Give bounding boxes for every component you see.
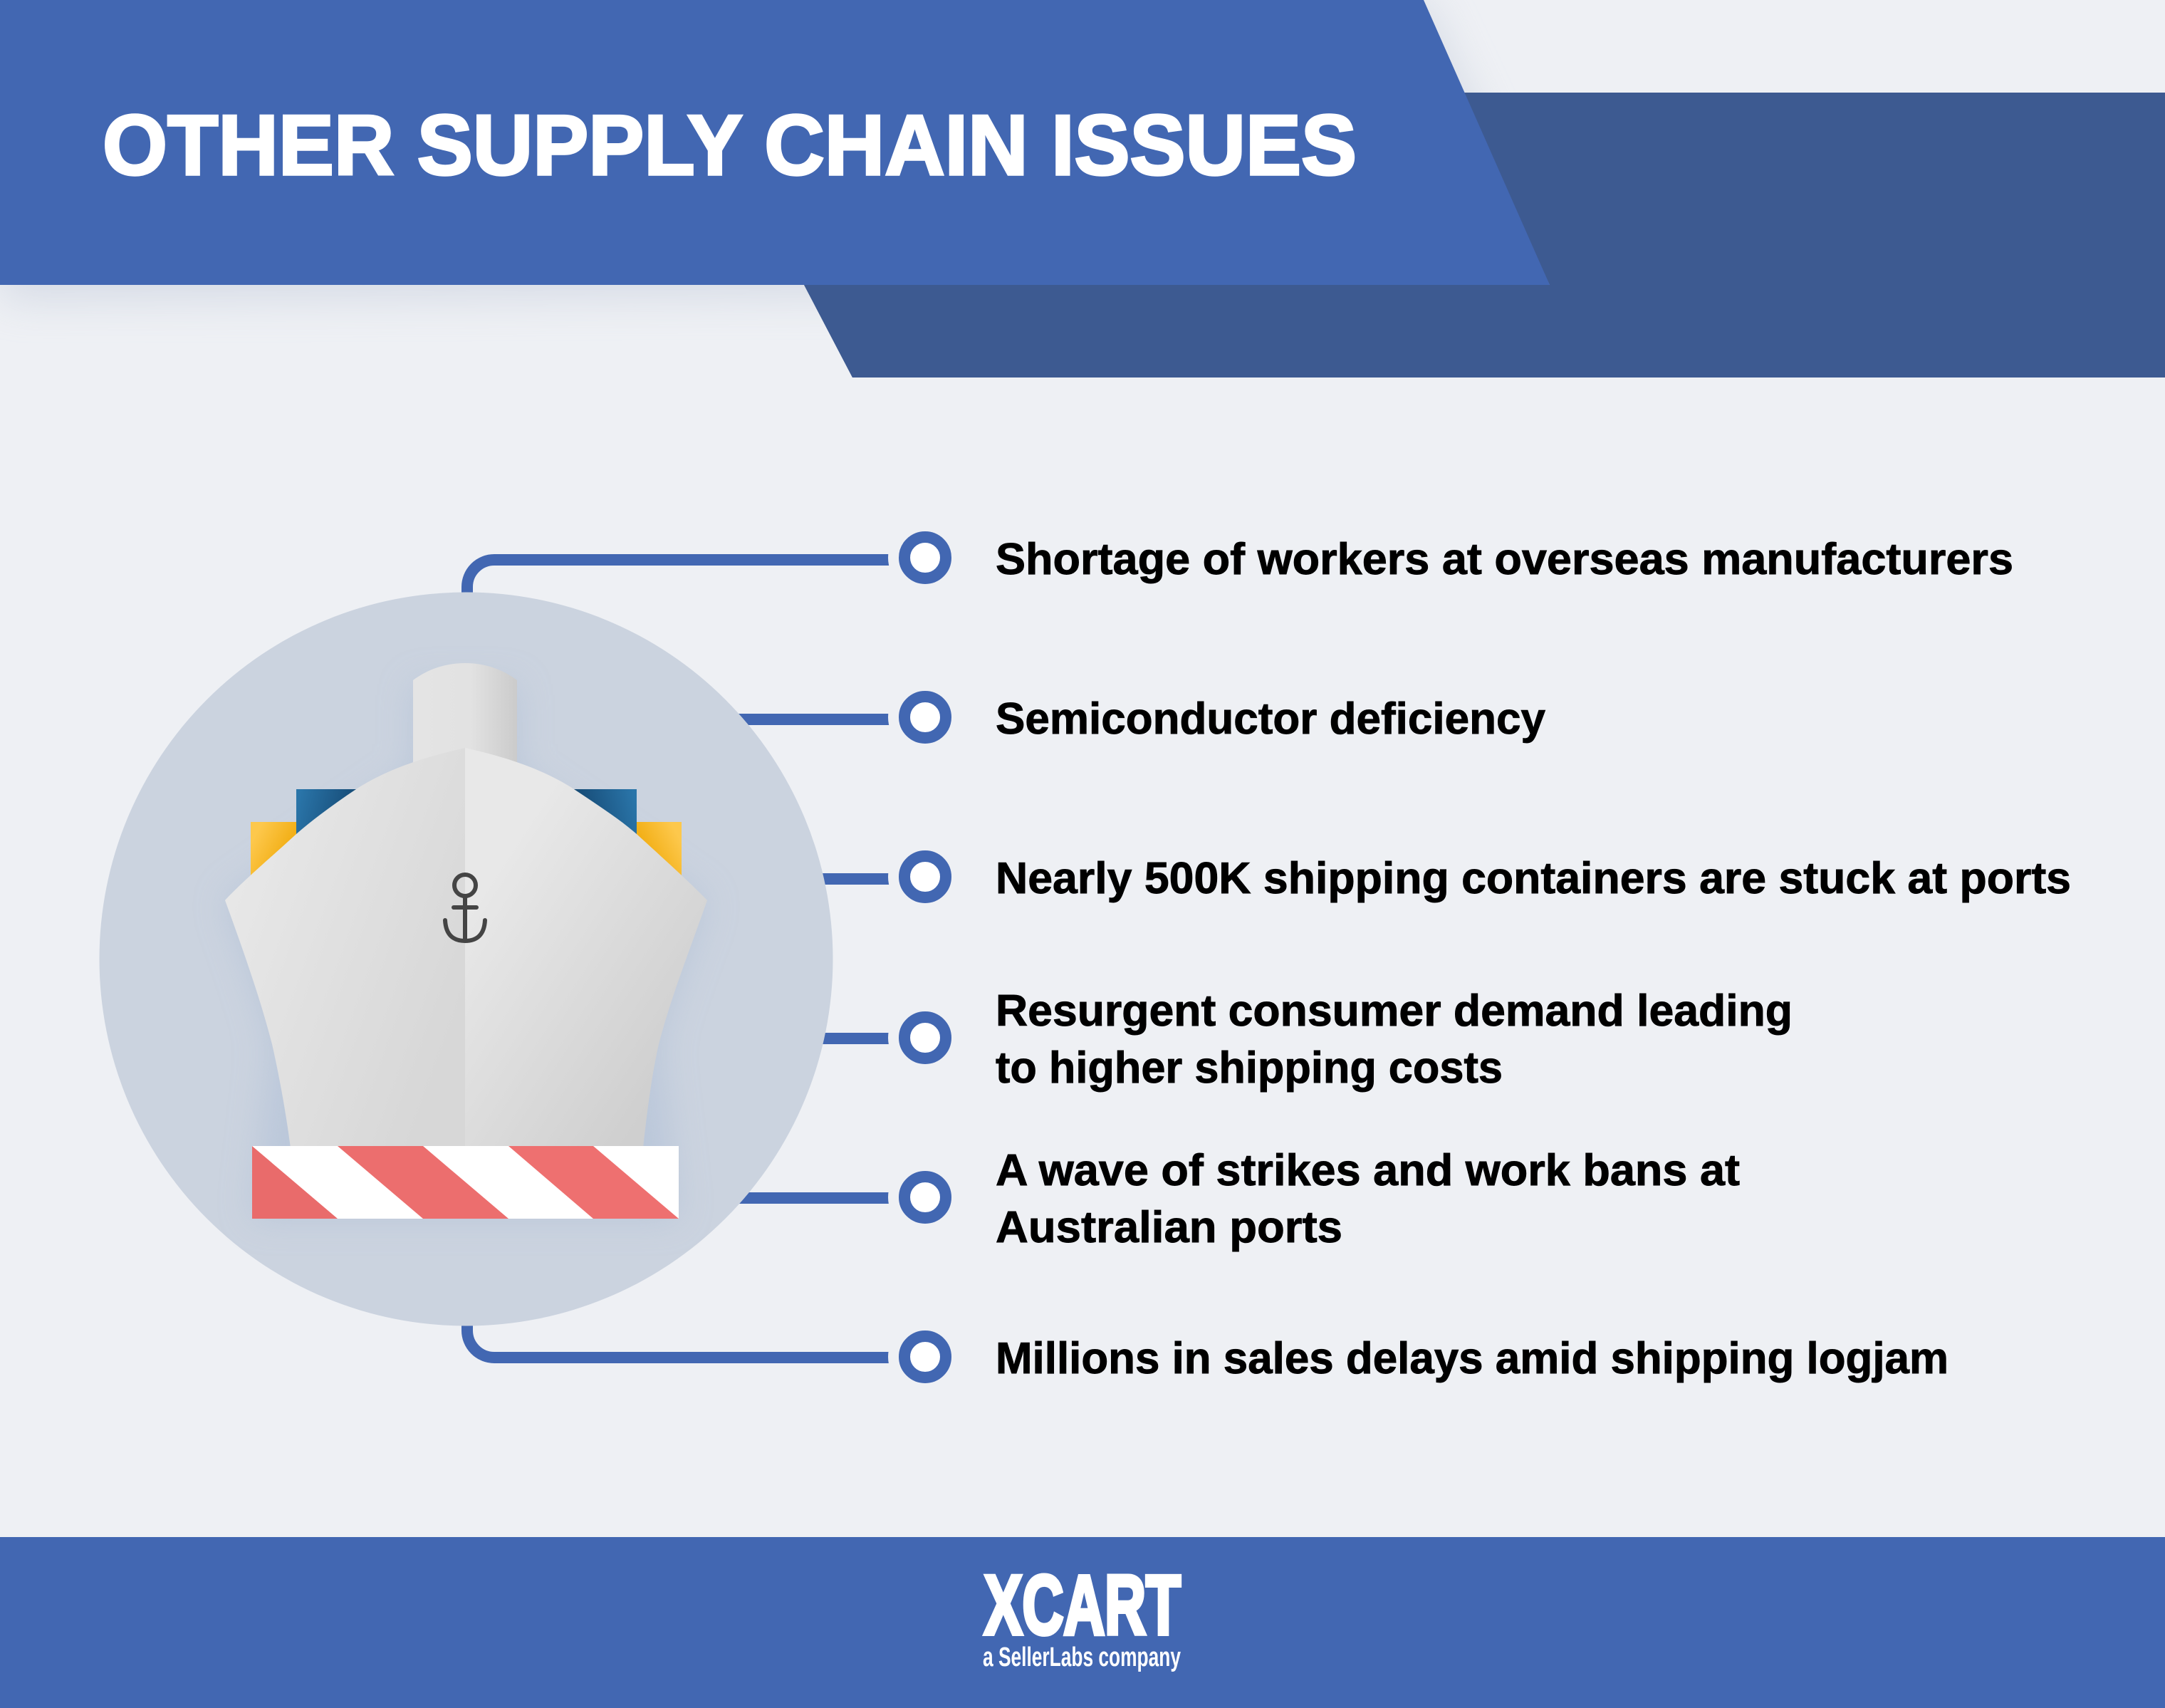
ship <box>225 663 707 1219</box>
yellow containers <box>251 822 296 886</box>
bullet list <box>888 521 2071 1394</box>
logo <box>983 1558 1181 1672</box>
item 1 <box>888 521 2013 595</box>
item 1: Shortage of workers at overseas manufacturers <box>996 535 2013 584</box>
item 4 <box>888 986 1793 1093</box>
front banner <box>0 0 1550 285</box>
hull right <box>465 748 707 1148</box>
item 2: Semiconductor deficiency <box>996 694 1546 744</box>
icon: anchor <box>445 875 485 941</box>
item 5 <box>888 1146 1740 1252</box>
footer bar <box>0 1537 2165 1708</box>
striped waterline band <box>252 1146 679 1219</box>
dark back band <box>804 93 2165 377</box>
backdrop circle <box>100 593 833 1326</box>
large circle with ship illustration <box>100 593 833 1326</box>
item 5: A wave of strikes and work bans at <box>996 1146 1740 1195</box>
blue containers <box>296 789 375 853</box>
dark band repaint over shadow <box>804 93 2165 377</box>
hull left <box>225 748 465 1148</box>
item 2 <box>888 680 1546 754</box>
banner shadow <box>0 0 1560 299</box>
logo: a SellerLabs company <box>983 1642 1181 1672</box>
item 6: Millions in sales delays amid shipping logjam <box>996 1334 1948 1383</box>
logo: XCART <box>984 1558 1181 1652</box>
title: OTHER SUPPLY CHAIN ISSUES <box>103 98 1357 193</box>
item 3 <box>888 840 2071 914</box>
funnel <box>413 663 517 798</box>
item 5: Australian ports <box>996 1203 1342 1252</box>
item 4: Resurgent consumer demand leading <box>996 986 1793 1036</box>
item 3: Nearly 500K shipping containers are stuck at ports <box>996 854 2071 903</box>
soft ship glow <box>225 684 707 1219</box>
item 6 <box>888 1320 1948 1394</box>
header banner <box>0 0 2165 377</box>
item 4: to higher shipping costs <box>996 1043 1503 1093</box>
connector lines <box>467 560 897 1358</box>
